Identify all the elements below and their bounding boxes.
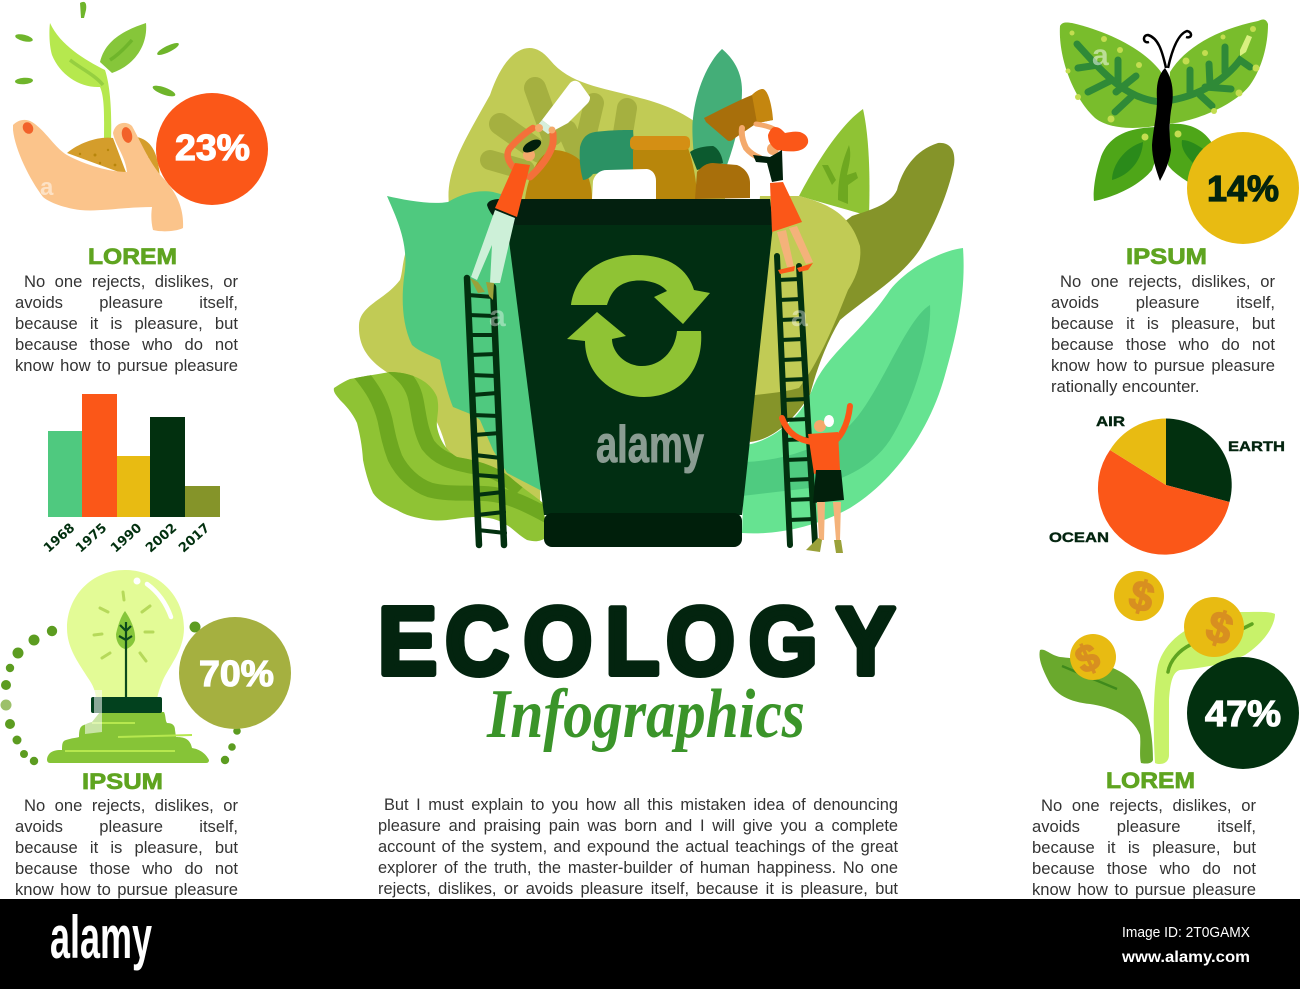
text block: bottom right: avoids pleasure itself, bbox=[1032, 817, 1256, 836]
text block: top right: avoids pleasure itself, bbox=[1051, 293, 1275, 312]
wing dots bbox=[1066, 26, 1260, 140]
footer band bbox=[0, 899, 1300, 989]
stat: 70% circle bbox=[179, 617, 291, 729]
text block: bottom right: know how to pursue pleasure bbox=[1032, 880, 1256, 899]
text block: bottom left: know how to pursue pleasure bbox=[15, 880, 238, 899]
bar chart: 1975 bbox=[73, 521, 110, 556]
bulb base bbox=[91, 697, 162, 713]
text block: top right: rationally encounter. bbox=[1051, 377, 1200, 396]
icon: coin plant: $ bbox=[1069, 636, 1106, 683]
hero watermarks bbox=[489, 300, 808, 333]
text block: bottom left bbox=[15, 796, 238, 899]
text block: bottom left: because it is pleasure, but bbox=[15, 838, 238, 857]
text block: center: rejects, dislikes, or avoids pleasure itself, because it is pleasure, but bbox=[378, 880, 898, 898]
person with brown pot bbox=[742, 124, 813, 274]
leaf and stem inside bulb bbox=[116, 611, 135, 649]
left leaf bbox=[1039, 650, 1153, 764]
soil bbox=[67, 137, 160, 178]
background leaves bbox=[334, 48, 964, 541]
stat: 47% circle: 47% bbox=[1205, 693, 1281, 734]
text block: center: But I must explain to you how all this mistaken idea of denouncing bbox=[384, 796, 898, 814]
left ladder bbox=[467, 278, 505, 545]
sparkle dashes bbox=[14, 2, 180, 98]
upper wings bbox=[1060, 22, 1165, 128]
stat: 70% circle: 70% bbox=[199, 653, 274, 694]
heading: IPSUM top right: IPSUM bbox=[1126, 244, 1207, 269]
icon: coin plant bbox=[1039, 570, 1275, 764]
icon: recycling arrows bbox=[567, 255, 710, 397]
bar chart bbox=[41, 394, 220, 556]
image id: Image ID: 2T0GAMX bbox=[1122, 924, 1250, 941]
text block: bottom right bbox=[1032, 796, 1256, 899]
bar chart: 1968 bbox=[41, 521, 78, 556]
right ladder bbox=[777, 256, 815, 545]
text block: bottom left: avoids pleasure itself, bbox=[15, 817, 238, 836]
hero watermarks: a bbox=[489, 300, 506, 333]
pie chart: AIR bbox=[1096, 413, 1125, 429]
text block: bottom left: No one rejects, dislikes, or bbox=[24, 796, 238, 815]
main title: ECOLOGY bbox=[378, 588, 895, 695]
dotted ring bbox=[0, 622, 241, 765]
text block: center: account of the system, and expound the actual teachings of the great bbox=[378, 838, 898, 856]
stat: 23% circle bbox=[156, 93, 268, 205]
bar chart: 2002 bbox=[143, 521, 180, 556]
icon: butterfly bbox=[1060, 19, 1268, 201]
text block: top right: because those who do not bbox=[1051, 335, 1275, 354]
text block: bottom right: because it is pleasure, but bbox=[1032, 838, 1256, 857]
stat: 47% circle bbox=[1187, 657, 1299, 769]
pie chart: OCEAN bbox=[1049, 529, 1109, 545]
footer logo: alamy bbox=[50, 904, 152, 971]
recycling bin bbox=[487, 199, 773, 547]
text block: center bbox=[378, 796, 898, 898]
hero illustration: recycling bin with people and leaves bbox=[334, 48, 964, 553]
stat: 14% circle: 14% bbox=[1207, 168, 1279, 209]
text block: top left: because those who do not bbox=[15, 335, 238, 354]
garbage pile in the bin bbox=[525, 81, 773, 199]
text block: top right: because it is pleasure, but bbox=[1051, 314, 1275, 333]
text block: top left: know how to pursue pleasure bbox=[15, 356, 238, 375]
hero watermarks: a bbox=[791, 300, 808, 333]
stat: 23% circle: 23% bbox=[175, 127, 250, 168]
butterfly body and antennae bbox=[1152, 68, 1173, 181]
watermark on bin: alamy bbox=[596, 416, 704, 474]
text block: center: explorer of the truth, the master-builder of human happiness. No one bbox=[378, 859, 898, 877]
text block: bottom left: because those who do not bbox=[15, 859, 238, 878]
icon: butterfly: a bbox=[1092, 39, 1109, 72]
text block: top left: avoids pleasure itself, bbox=[15, 293, 238, 312]
sprout leaves and stem bbox=[100, 23, 146, 73]
bar chart: 2017 bbox=[176, 521, 213, 556]
text block: center: pleasure and praising pain was born and I will give you a complete bbox=[378, 817, 898, 835]
rays bbox=[94, 592, 153, 661]
text block: top left bbox=[15, 272, 238, 375]
text block: bottom right: because those who do not bbox=[1032, 859, 1256, 878]
bar chart: 1990 bbox=[108, 521, 145, 556]
text block: top right: No one rejects, dislikes, or bbox=[1060, 272, 1275, 291]
text block: bottom right: No one rejects, dislikes, or bbox=[1041, 796, 1256, 815]
subtitle: Infographics bbox=[486, 676, 805, 753]
icon: hand holding sprout bbox=[13, 2, 183, 231]
right leaf bbox=[1154, 612, 1275, 764]
text block: top left: because it is pleasure, but bbox=[15, 314, 238, 333]
lower wings bbox=[1094, 127, 1160, 201]
coins bbox=[1114, 571, 1164, 621]
person below with raised arms bbox=[782, 406, 850, 553]
icon: coin plant: $ bbox=[1200, 601, 1239, 655]
wing veins bbox=[1077, 44, 1250, 112]
text block: top left: No one rejects, dislikes, or bbox=[24, 272, 238, 291]
icon: hand holding sprout: a bbox=[40, 174, 54, 201]
heading: IPSUM bottom left: IPSUM bbox=[82, 769, 163, 794]
pedestal steps bbox=[47, 712, 209, 763]
icon: light bulb with sprout bbox=[0, 570, 241, 765]
text block: top right: know how to pursue pleasure bbox=[1051, 356, 1275, 375]
icon: coin plant: $ bbox=[1124, 570, 1159, 622]
bulb glass bbox=[67, 570, 184, 700]
heading: LOREM top left: LOREM bbox=[88, 244, 177, 269]
pie chart: EARTH bbox=[1228, 438, 1285, 454]
pie chart bbox=[1049, 413, 1285, 555]
hand bbox=[13, 120, 183, 231]
heading: LOREM bottom right: LOREM bbox=[1106, 768, 1195, 793]
person with bottle bbox=[470, 124, 556, 300]
stat: 14% circle bbox=[1187, 132, 1299, 244]
website: www.alamy.com bbox=[1121, 949, 1250, 966]
text block: top right bbox=[1051, 272, 1275, 396]
